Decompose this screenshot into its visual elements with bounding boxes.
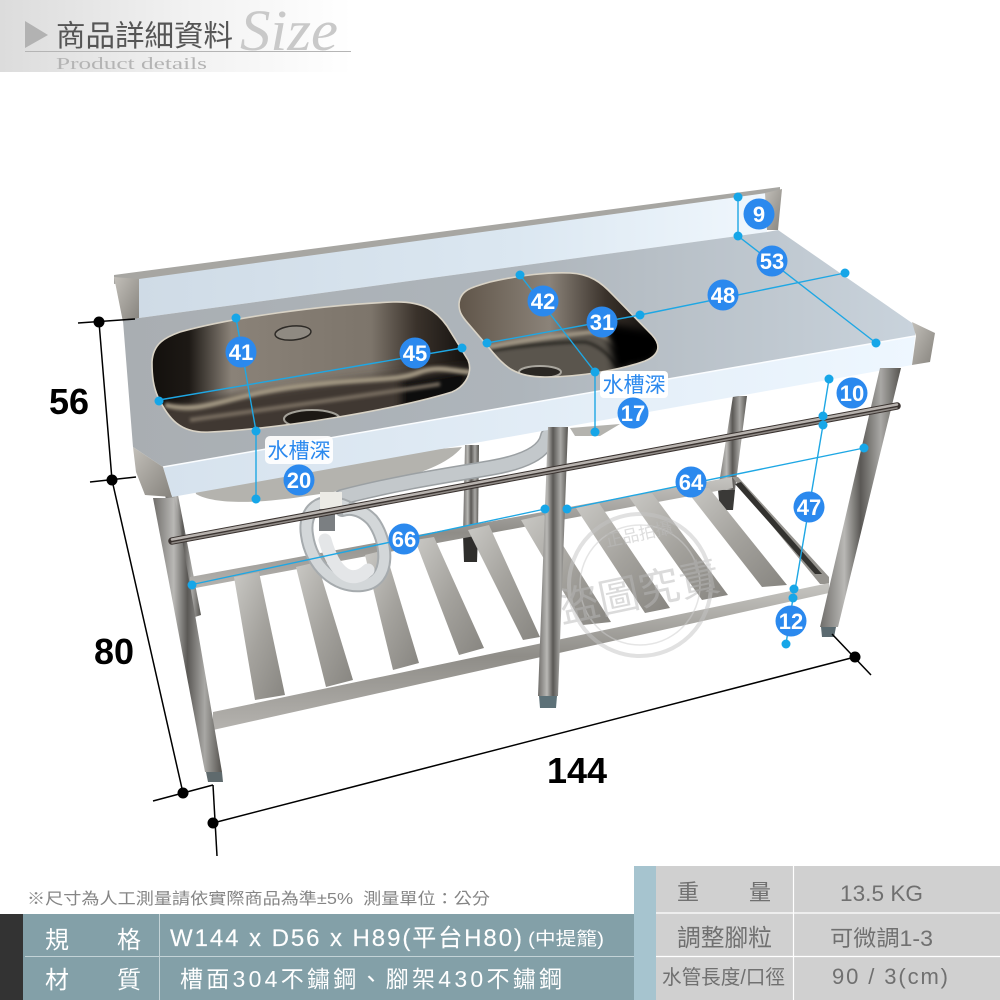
dimension label: 144: 144 [547, 750, 607, 791]
watermark seal [554, 514, 724, 656]
badge: 66: 66 [392, 527, 416, 552]
dimension lines [78, 316, 871, 856]
counter top surface [123, 230, 915, 467]
badge: 9 [744, 198, 774, 230]
badge: 45: 45 [403, 341, 427, 366]
badge: 12: 12 [779, 609, 803, 634]
badge: 10 [836, 378, 868, 408]
badge: 47: 47 [797, 495, 821, 520]
product illustration: sink table [114, 187, 935, 782]
badge: 48 [708, 280, 738, 310]
badge: 53: 53 [760, 249, 784, 274]
lower shelf frame [190, 477, 829, 589]
small sink basin [455, 270, 665, 380]
shelf slats [234, 488, 787, 700]
badge: 42 [528, 286, 558, 316]
badge: 45 [400, 338, 430, 368]
subheading: Product details: Product details [56, 54, 207, 73]
overflow plate [274, 324, 312, 342]
badge: 20: 20 [287, 468, 311, 493]
row: 材質 [45, 966, 562, 994]
dimension label: 80: 80 [94, 631, 134, 672]
row: 水管長度/口徑 [662, 964, 948, 989]
badge: 66 [388, 524, 420, 554]
corner caps [133, 322, 935, 497]
badge: 48: 48 [711, 283, 735, 308]
header background [0, 0, 352, 72]
badge: 20 [284, 464, 314, 496]
badge: 64: 64 [679, 470, 704, 495]
badge: 10: 10 [840, 381, 864, 406]
row: 調整腳粒: 調整腳粒 [677, 925, 772, 952]
badge: 9: 9 [753, 202, 765, 227]
row: 材質: 槽面304不鏽鋼、腳架430不鏽鋼 [180, 966, 562, 992]
row: 調整腳粒 [677, 925, 933, 952]
badge: 53 [756, 246, 788, 276]
badge: 31 [586, 306, 618, 338]
row: 重量: 量 [749, 880, 771, 905]
back legs [165, 396, 747, 618]
heading: 商品詳細資料: 商品詳細資料 [56, 20, 233, 53]
row: 水管長度/口徑: 90 / 3(cm) [832, 964, 948, 989]
icon: header triangle [25, 21, 48, 48]
measurement note: ※尺寸為人工測量請依實際商品為準±5% 測量單位：公分 [27, 889, 490, 908]
row: 重量: 重 [677, 880, 699, 905]
section header [0, 0, 352, 73]
row: 規格: 格 [117, 927, 141, 954]
row: 重量: 13.5 KG [840, 881, 923, 906]
backsplash [114, 187, 782, 322]
badge: 31: 31 [590, 310, 614, 335]
badge: 42: 42 [531, 289, 555, 314]
badge: 12 [776, 606, 806, 636]
row: 重量 [677, 880, 923, 906]
panel: specification table [0, 914, 634, 1000]
handle rail [172, 404, 897, 543]
front shelf bar [213, 583, 829, 730]
badge: 17 [618, 398, 648, 428]
label: 水槽深 (large sink): 水槽深 [268, 440, 330, 463]
watermark seal: 正品拍攝 [604, 518, 674, 551]
counter front lip [163, 336, 915, 497]
sink basin underside [190, 424, 620, 502]
panel: physical data table [634, 866, 1000, 1000]
dimension label: 56: 56 [49, 381, 89, 422]
front legs [153, 368, 901, 782]
row: 規格: W144 x D56 x H89(平台H80) [170, 925, 522, 952]
label: 水槽深 (small sink): 水槽深 [602, 374, 666, 397]
badge: 41 [226, 336, 256, 368]
row: 規格 [45, 925, 604, 954]
row: 材質: 材 [45, 967, 69, 994]
badge: 41: 41 [229, 340, 253, 365]
row: 材質: 質 [117, 967, 141, 994]
row: 調整腳粒: 可微調1-3 [830, 926, 933, 951]
drain hose [306, 436, 548, 585]
measurement lines [154, 192, 880, 648]
row: 規格: (中提籠) [528, 929, 604, 949]
badge: 17: 17 [621, 401, 645, 426]
row: 規格: 規 [45, 927, 69, 954]
large sink basin [150, 300, 475, 440]
badge: 47 [794, 492, 824, 522]
watermark seal: 盜圖究責 [554, 553, 724, 632]
row: 水管長度/口徑: 水管長度/口徑 [662, 966, 785, 989]
badge: 64 [676, 466, 706, 498]
